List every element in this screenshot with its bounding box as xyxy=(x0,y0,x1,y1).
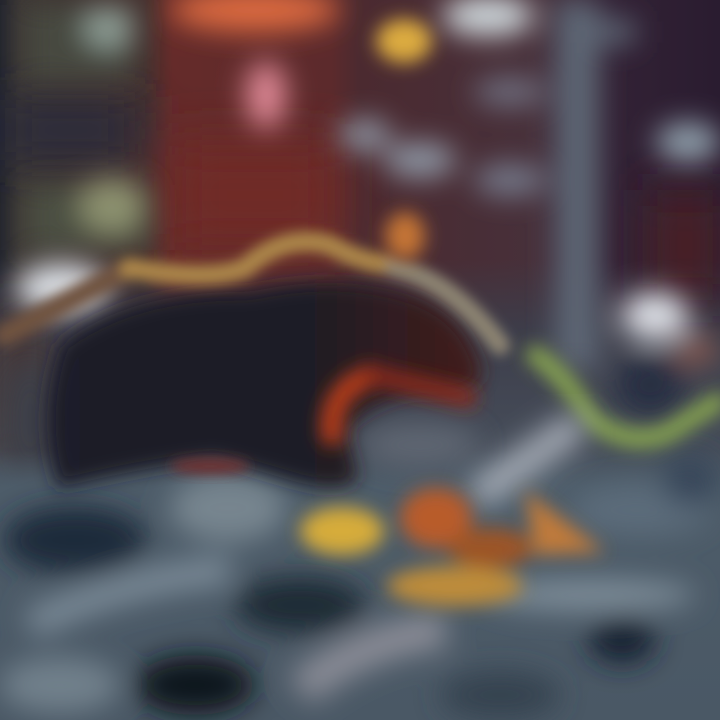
building shading xyxy=(0,100,720,460)
street lamp xyxy=(376,19,432,63)
orange glow xyxy=(170,0,340,32)
lower street haze xyxy=(0,260,720,500)
bear ear highlight xyxy=(385,212,425,260)
pale stick xyxy=(485,430,570,490)
bear xyxy=(5,212,500,488)
bear fur ridge xyxy=(5,242,500,345)
bear mouth xyxy=(332,375,468,435)
gold and orange leaves xyxy=(300,488,605,606)
grey tree and highlights xyxy=(4,0,720,480)
ground xyxy=(0,423,720,720)
bear body xyxy=(47,283,482,488)
green trend line xyxy=(535,355,718,438)
windows xyxy=(25,5,286,250)
bear leg glow xyxy=(170,458,250,474)
